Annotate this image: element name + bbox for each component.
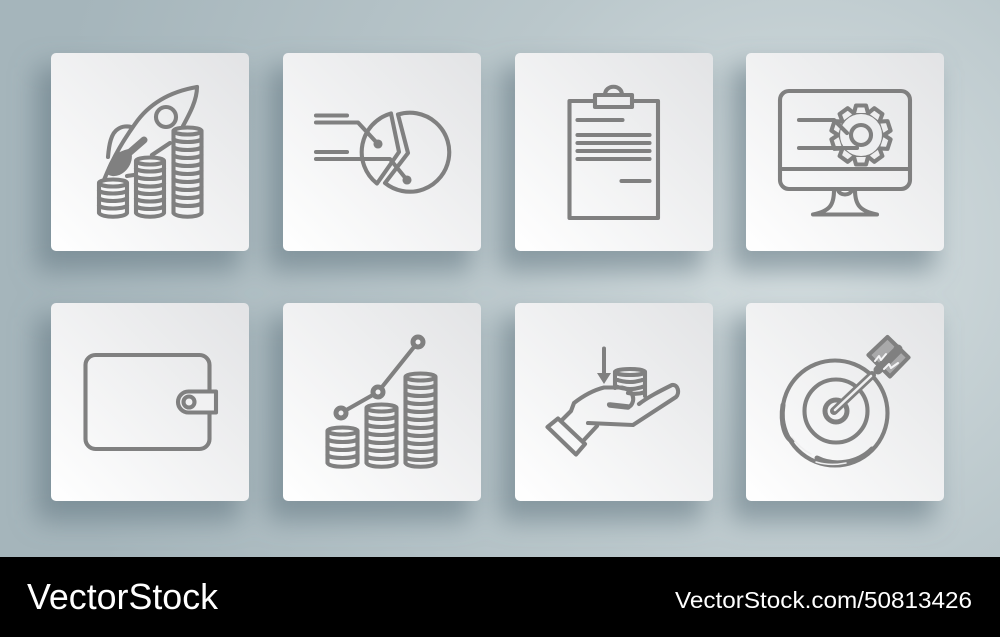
icon: down arrow [597, 348, 611, 384]
icon: rocket [104, 87, 197, 180]
icon: pie chart labels [316, 116, 410, 182]
icon: coin stack small [99, 180, 127, 217]
icon: trend line [336, 337, 423, 418]
icon: coin stack medium [366, 404, 396, 467]
panel: growth chart coins [283, 303, 481, 501]
panel: target with arrow [746, 303, 944, 501]
icon: coin stack large [406, 374, 436, 467]
panel: clipboard [515, 53, 713, 251]
icon: coin stack large [174, 128, 202, 217]
footer bar [0, 557, 1000, 637]
icon: hand [548, 385, 678, 454]
panel: monitor with gear [746, 53, 944, 251]
icon: pie chart [362, 113, 449, 192]
icon: coins in hand [615, 369, 645, 396]
icon: coin stack medium [136, 158, 164, 217]
brand name: VectorStock [27, 576, 219, 617]
icon: target [782, 360, 888, 466]
icon: wallet [86, 355, 216, 449]
icon: coin stack small [328, 428, 358, 467]
card shadows [36, 66, 935, 521]
icon: clipboard [570, 87, 658, 218]
panel: hand with coins [515, 303, 713, 501]
panel: rocket and coins [51, 53, 249, 251]
icon: gear [831, 106, 891, 164]
icon: arrow [834, 337, 908, 411]
panel: wallet [51, 303, 249, 501]
icon: monitor [780, 91, 910, 214]
panel: pie chart [283, 53, 481, 251]
image id: VectorStock.com/50813426 [675, 587, 972, 613]
icon: gear labels [799, 120, 857, 148]
